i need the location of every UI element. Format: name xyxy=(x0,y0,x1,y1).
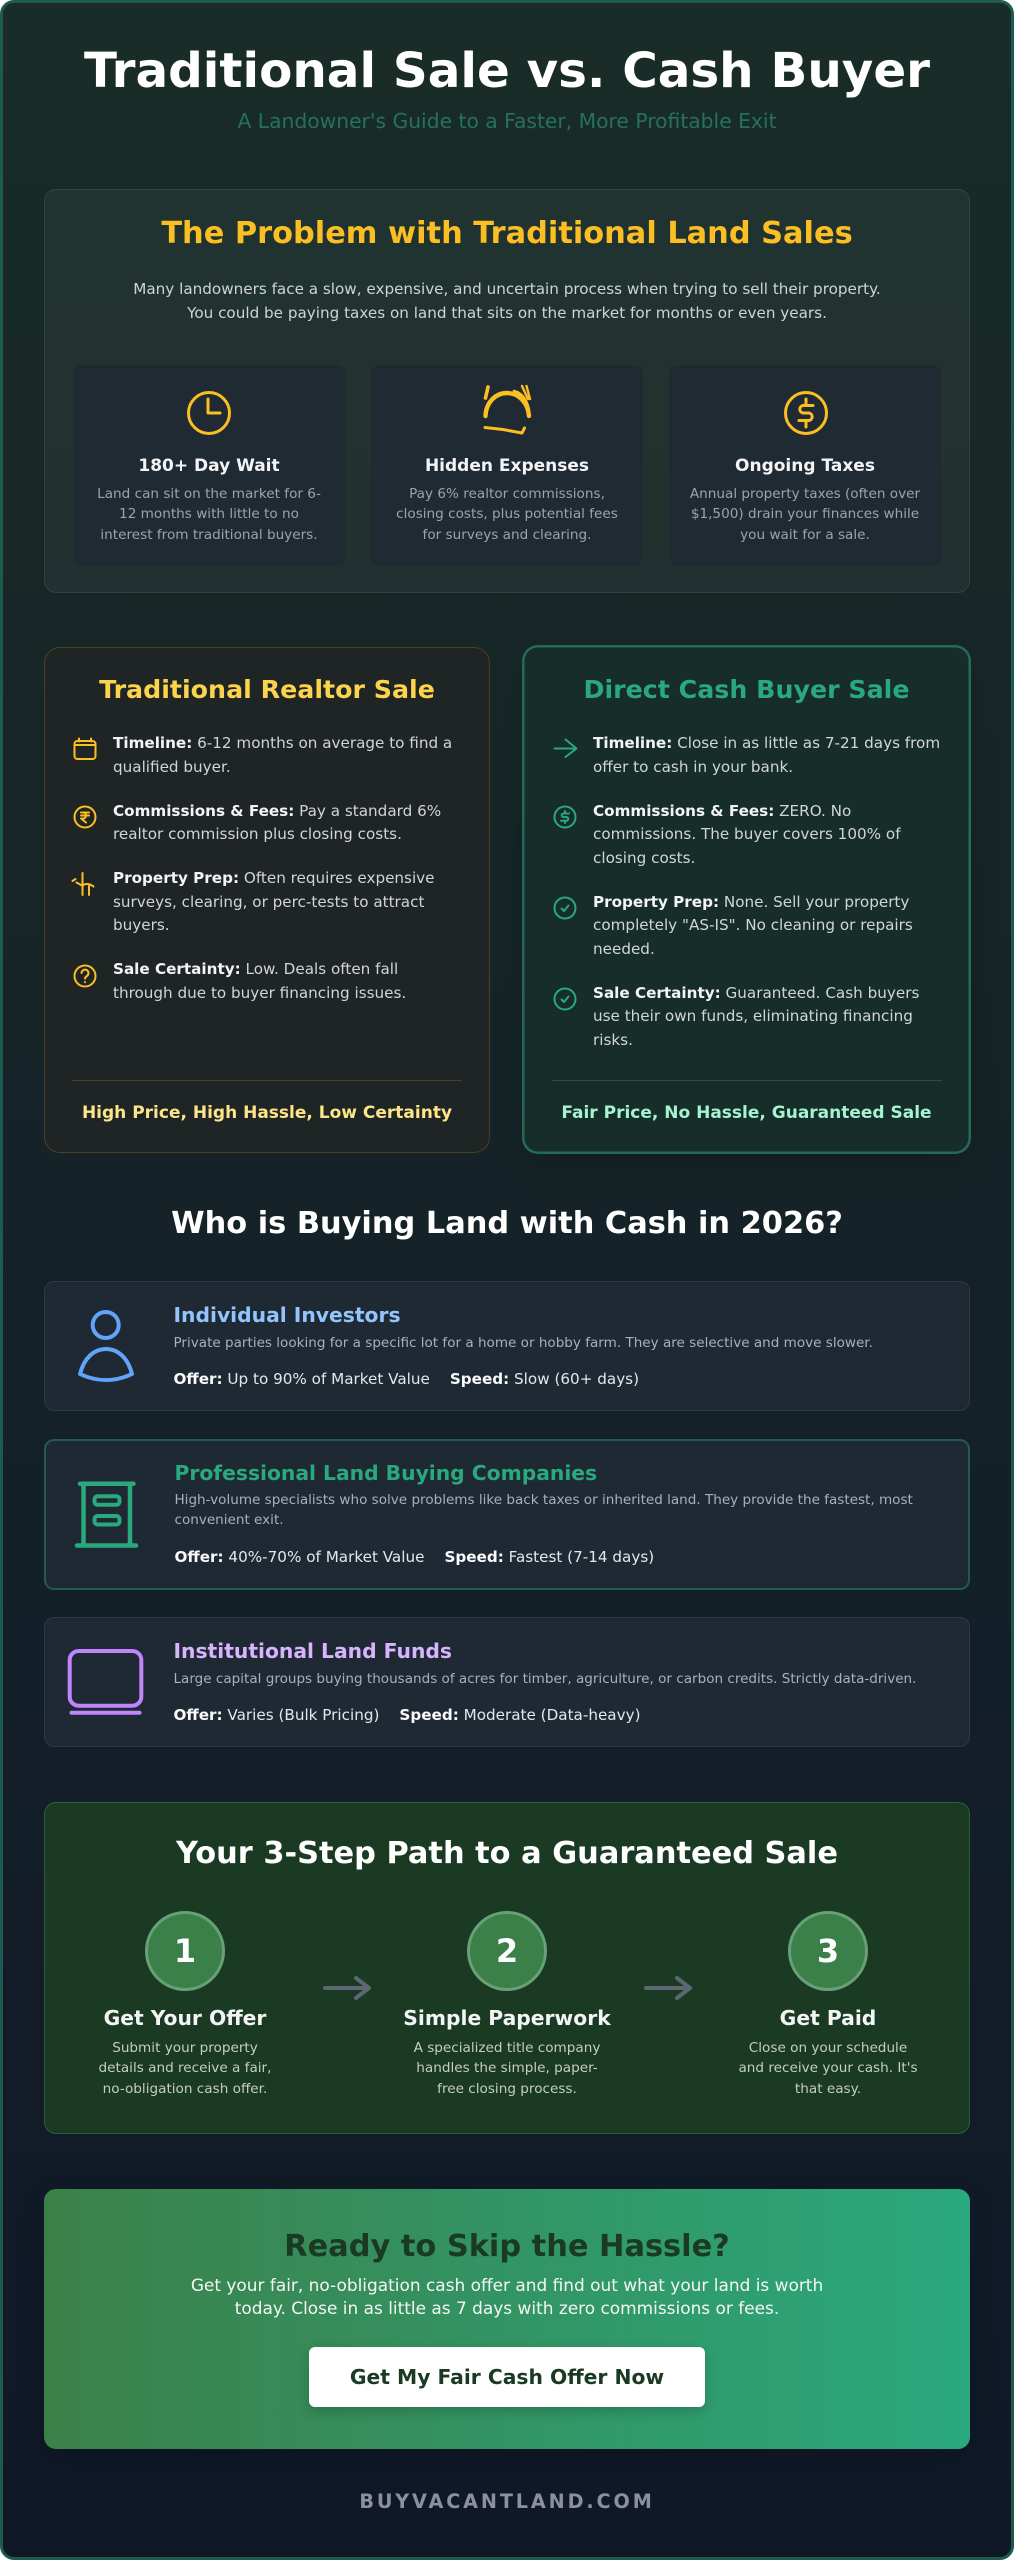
step text xyxy=(99,2040,271,2097)
item text: buyers. xyxy=(113,916,170,934)
item text xyxy=(113,802,441,843)
step title: Get Paid xyxy=(780,2006,876,2030)
buyer card: individual investors xyxy=(44,1281,970,1411)
column heading: Traditional Realtor Sale xyxy=(99,675,435,704)
item text: Sale Certainty: Low. Deals often fall xyxy=(113,960,398,978)
card text: Pay 6% realtor commissions, xyxy=(409,486,605,502)
card: hidden expenses xyxy=(371,365,643,566)
problem heading: The Problem with Traditional Land Sales xyxy=(161,216,853,251)
buyer description: High-volume specialists who solve problems like back taxes or inherited land. They provide the fastest, most xyxy=(174,1492,913,1508)
item text: Sale Certainty: Guaranteed. Cash buyers xyxy=(593,984,919,1002)
step text: Close on your schedule xyxy=(749,2040,907,2056)
step text: details and receive a fair, xyxy=(99,2060,271,2076)
column heading: Direct Cash Buyer Sale xyxy=(583,675,910,704)
item text: Property Prep: Often requires expensive xyxy=(113,869,435,887)
step number: 1 xyxy=(174,1932,196,1970)
item: timeline xyxy=(74,734,452,776)
step number: 2 xyxy=(496,1932,518,1970)
icon: dollar circle xyxy=(554,806,576,828)
section heading: who is buying: Who is Buying Land with Cash in 2026? xyxy=(171,1206,843,1241)
item text: through due to buyer financing issues. xyxy=(113,984,406,1002)
buyer description: convenient exit. xyxy=(174,1512,284,1528)
step text: handles the simple, paper- xyxy=(416,2060,598,2076)
step text: A specialized title company xyxy=(414,2040,600,2056)
step number xyxy=(145,1910,225,1990)
icon: person xyxy=(78,1310,134,1382)
footer brand: BUYVACANTLAND.COM xyxy=(359,2490,655,2513)
item text xyxy=(113,734,452,776)
buyer name: Individual Investors xyxy=(174,1303,401,1327)
card heading: Hidden Expenses xyxy=(425,456,589,476)
item text: commissions. The buyer covers 100% of xyxy=(593,825,901,843)
step number xyxy=(467,1910,547,1990)
item text xyxy=(593,802,901,867)
card text: 12 months with little to no xyxy=(119,506,299,522)
card text: $1,500) drain your finances while xyxy=(691,506,919,522)
item text xyxy=(593,892,913,958)
buyer description xyxy=(174,1492,913,1528)
cta text xyxy=(44,2274,970,2321)
cta button xyxy=(309,2347,705,2407)
buyer card: institutional land funds xyxy=(44,1617,970,1747)
icon: check circle xyxy=(554,988,576,1010)
icon: clock xyxy=(187,391,231,435)
icon: hidden expenses xyxy=(483,384,532,434)
cta button: Get My Fair Cash Offer Now xyxy=(350,2365,664,2389)
card text: Land can sit on the market for 6- xyxy=(97,486,321,502)
arrow: step 2 to 3 xyxy=(644,1976,692,2000)
item text: realtor commission plus closing costs. xyxy=(113,825,402,843)
card heading: Ongoing Taxes xyxy=(735,456,875,476)
step number: 3 xyxy=(817,1932,839,1970)
card text: you wait for a sale. xyxy=(740,527,870,543)
item: property prep xyxy=(72,869,435,934)
step text: no-obligation cash offer. xyxy=(103,2081,267,2097)
icon: building xyxy=(74,1482,138,1548)
cta text: Get your fair, no-obligation cash offer and find out what your land is worth xyxy=(191,2274,823,2294)
item text xyxy=(113,960,406,1002)
item: commissions xyxy=(74,802,441,843)
steps heading: Your 3-Step Path to a Guaranteed Sale xyxy=(176,1836,838,1870)
step title: Simple Paperwork xyxy=(403,2006,611,2030)
buyer name: Institutional Land Funds xyxy=(174,1639,452,1663)
item: commissions xyxy=(554,802,901,867)
offer and speed: Offer: Up to 90% of Market Value Speed: Slow (60+ days) xyxy=(174,1370,639,1388)
card text: interest from traditional buyers. xyxy=(100,527,318,543)
icon: arrow right xyxy=(554,738,578,758)
column verdict: Fair Price, No Hassle, Guaranteed Sale xyxy=(561,1103,932,1123)
buyer description: Private parties looking for a specific lot for a home or hobby farm. They are selective and move slower. xyxy=(174,1334,873,1350)
step 3 xyxy=(678,1910,978,2110)
card text xyxy=(97,486,321,543)
step text xyxy=(678,2038,978,2099)
item text xyxy=(593,984,919,1049)
item text: surveys, clearing, or perc-tests to attract xyxy=(113,893,424,911)
buyer description: Large capital groups buying thousands of acres for timber, agriculture, or carbon credits. Strictly data-driven. xyxy=(174,1670,916,1686)
panel: traditional realtor sale xyxy=(44,647,490,1153)
icon: check circle xyxy=(554,896,576,920)
buyer card: professional land buying companies xyxy=(44,1439,970,1590)
icon: dollar circle xyxy=(784,391,828,435)
step text: Submit your property xyxy=(112,2040,258,2056)
step text xyxy=(357,2038,657,2099)
offer and speed: Offer: Varies (Bulk Pricing) Speed: Moderate (Data-heavy) xyxy=(174,1706,640,1724)
step text: and receive your cash. It's xyxy=(738,2060,918,2076)
icon: laptop xyxy=(68,1649,144,1715)
card text: closing costs, plus potential fees xyxy=(396,506,618,522)
card text xyxy=(396,486,618,543)
panel: call to action xyxy=(44,2188,970,2448)
step 1 xyxy=(99,1911,271,2097)
card text: for surveys and clearing. xyxy=(423,527,591,543)
item text: needed. xyxy=(593,940,655,958)
title: Traditional Sale vs. Cash Buyer xyxy=(84,43,930,99)
item text xyxy=(593,734,940,776)
item text: Timeline: Close in as little as 7-21 days from xyxy=(593,734,940,752)
step title: Get Your Offer xyxy=(104,2006,266,2030)
problem intro text: You could be paying taxes on land that sits on the market for months or even years. xyxy=(187,304,827,322)
card: 180+ day wait xyxy=(73,365,345,566)
item text: risks. xyxy=(593,1031,633,1049)
item text: use their own funds, eliminating financing xyxy=(593,1007,913,1025)
item text: completely "AS-IS". No cleaning or repairs xyxy=(593,916,913,934)
item: property prep xyxy=(554,892,913,958)
cta heading: Ready to Skip the Hassle? xyxy=(284,2228,730,2264)
buyer name: Professional Land Buying Companies xyxy=(174,1461,597,1485)
panel: direct cash buyer sale xyxy=(522,645,971,1154)
item: sale certainty xyxy=(74,960,406,1002)
problem intro text xyxy=(133,280,881,322)
step 2 xyxy=(357,1910,657,2110)
card: ongoing taxes xyxy=(669,365,941,566)
step text: that easy. xyxy=(795,2081,861,2097)
panel: the problem xyxy=(44,189,970,593)
card text xyxy=(690,486,920,543)
problem intro text: Many landowners face a slow, expensive, and uncertain process when trying to sell their property. xyxy=(133,280,881,298)
icon: rupee circle xyxy=(74,806,96,828)
panel: 3-step path xyxy=(44,1802,970,2134)
item text: Timeline: 6-12 months on average to find a xyxy=(113,734,452,752)
item text: Commissions & Fees: ZERO. No xyxy=(593,802,851,820)
icon: property prep xyxy=(72,872,94,896)
step text: free closing process. xyxy=(437,2081,577,2097)
step number xyxy=(788,1910,868,1990)
icon: calendar xyxy=(74,738,96,760)
subtitle: A Landowner's Guide to a Faster, More Profitable Exit xyxy=(237,109,777,133)
offer and speed: Offer: 40%-70% of Market Value Speed: Fastest (7-14 days) xyxy=(174,1548,654,1566)
item text: Property Prep: None. Sell your property xyxy=(593,892,909,910)
item: sale certainty xyxy=(554,984,919,1049)
item text: closing costs. xyxy=(593,849,695,867)
cta text: today. Close in as little as 7 days with zero commissions or fees. xyxy=(235,2298,779,2318)
column verdict: High Price, High Hassle, Low Certainty xyxy=(82,1103,452,1123)
icon: question circle xyxy=(74,964,96,988)
item text: offer to cash in your bank. xyxy=(593,758,793,776)
arrow: step 1 to 2 xyxy=(323,1976,371,2000)
item text xyxy=(113,869,435,934)
item text: Commissions & Fees: Pay a standard 6% xyxy=(113,802,441,820)
item: timeline xyxy=(554,734,940,776)
item text: qualified buyer. xyxy=(113,758,231,776)
card text: Annual property taxes (often over xyxy=(690,486,920,502)
card heading: 180+ Day Wait xyxy=(138,456,280,476)
